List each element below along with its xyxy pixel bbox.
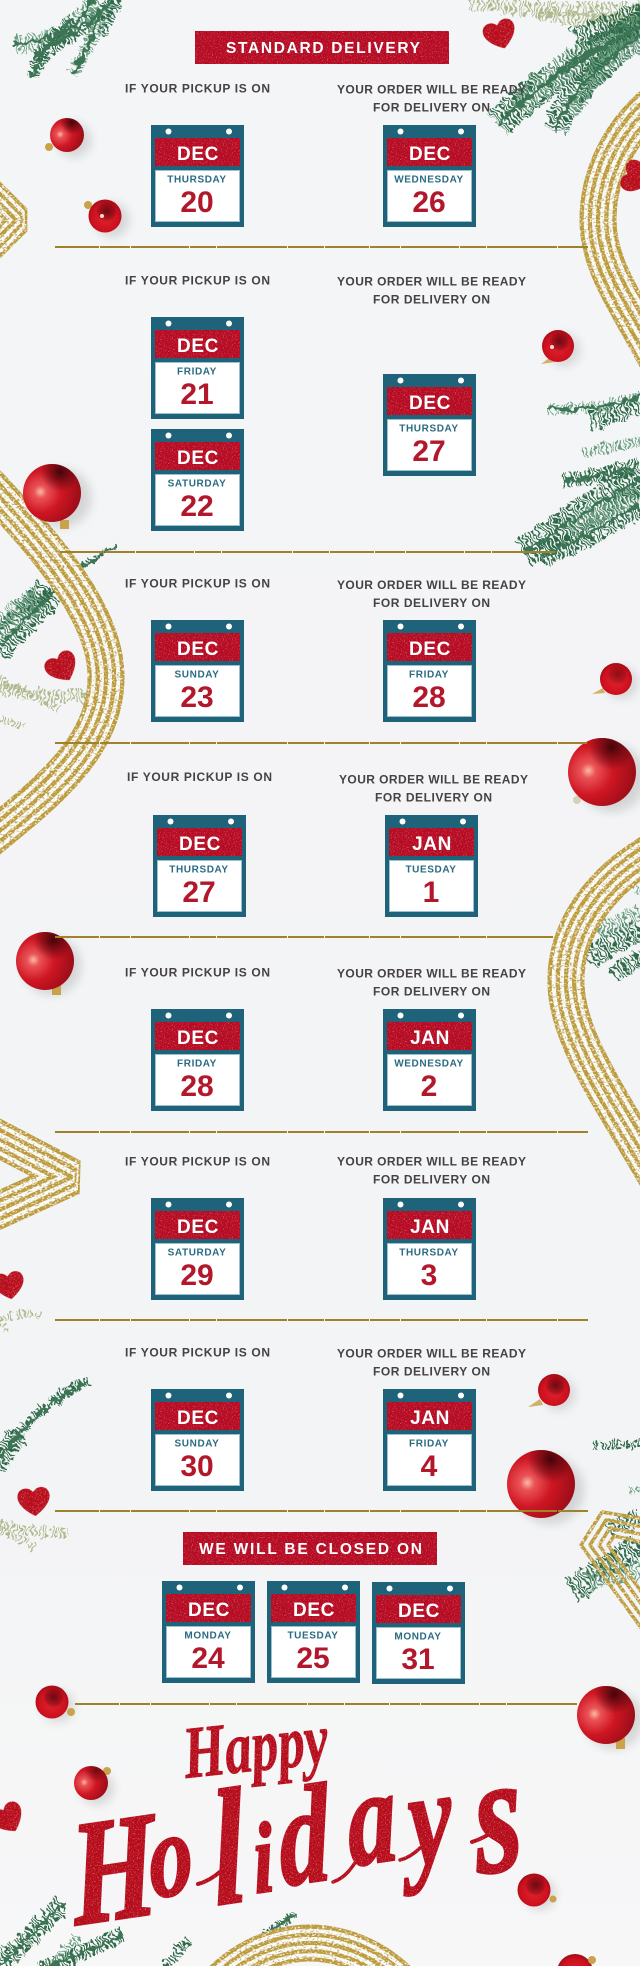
heart: left script [0,1798,29,1839]
bauble: right lower large [507,1450,584,1524]
calendar: Dec 27: 27 [412,435,446,468]
gold ribbon: right top curve [598,100,640,362]
calendar: Dec 22: SATURDAY [168,478,226,490]
heading: pickup: IF YOUR PICKUP IS ON [127,770,272,784]
bauble: right small [592,663,638,699]
banner: we will be closed on [183,1532,437,1565]
bauble: right script small [518,1874,556,1910]
heading: ready [337,1346,526,1378]
calendar: Dec 30: 30 [180,1450,214,1483]
calendar: Dec 28: FRIDAY [409,670,449,680]
calendar: Dec 24: MONDAY [184,1630,232,1642]
calendar: Dec 22: 22 [180,490,214,523]
foliage: top right branch [470,2,640,130]
calendar: Jan 4: FRIDAY [409,1438,449,1450]
heading: pickup: IF YOUR PICKUP IS ON [125,274,270,288]
script lettering: Holidays: o [144,1786,197,1924]
script lettering: Happy: Happy [178,1698,332,1794]
calendar: Jan 1 [385,815,478,917]
foliage: left middle sprigs [0,547,115,726]
heading: ready: YOUR ORDER WILL BE READY [337,966,526,980]
calendar: Dec 25: 25 [296,1642,330,1675]
calendar: Dec 29 [151,1198,244,1300]
calendar: Dec 21 [151,317,244,419]
calendar: Dec 24: 24 [191,1642,225,1675]
calendar: Dec 20: DEC [177,144,219,165]
bauble: right lower small [528,1374,575,1410]
calendar: Dec 31: 31 [401,1643,435,1676]
heading: pickup: IF YOUR PICKUP IS ON [125,966,270,980]
script lettering: Holidays: d [273,1755,336,1917]
gold ribbon: left curve [0,482,106,842]
divider 1 [55,246,588,248]
heading: pickup: IF YOUR PICKUP IS ON [125,1346,270,1360]
calendar: Dec 28: 28 [180,1070,214,1103]
heading: ready: FOR DELIVERY ON [375,790,492,804]
calendar: Jan 3 [383,1198,476,1300]
calendar: Dec 24 [162,1581,255,1683]
bauble: left above script [36,1686,75,1722]
row 5 [125,966,526,1111]
calendar: Dec 26: DEC [409,144,451,165]
calendar: Dec 29: 29 [180,1259,214,1292]
heading: ready [337,1154,526,1186]
heading: ready: FOR DELIVERY ON [373,1172,490,1186]
script lettering: Holidays: i [249,1801,277,1915]
row 4 [127,770,528,917]
script flourish: connecting strokes [198,1824,502,1884]
heading: ready: YOUR ORDER WILL BE READY [337,1154,526,1168]
calendar: Dec 21: 21 [180,378,214,411]
bauble: top left small [45,118,91,157]
calendar: Dec 25: DEC [293,1600,335,1621]
calendar: Dec 22 [151,429,244,531]
calendar: Jan 3: 3 [421,1259,437,1292]
gold ribbon: left chevron [0,1132,72,1216]
row 3 [125,576,526,722]
calendar: Dec 28: DEC [177,1028,219,1049]
heading: ready [337,578,526,610]
calendar: Jan 2: WEDNESDAY [394,1058,464,1070]
foliage: bottom left sprigs [0,1904,296,1966]
calendar: Dec 28: DEC [409,639,451,660]
calendar: Jan 2 [383,1009,476,1111]
calendar: Dec 20: THURSDAY [167,174,227,186]
heading: pickup: IF YOUR PICKUP IS ON [125,1154,270,1168]
divider 7 [55,1510,588,1512]
row 6 [125,1154,526,1300]
calendar: Jan 1: 1 [423,876,439,909]
bauble: right small dark [541,330,580,366]
divider 3 [55,742,587,744]
calendar: Dec 27 [383,374,476,476]
calendar: Dec 26: 26 [412,186,446,219]
bauble: left large [23,464,91,529]
banner: standard delivery: STANDARD DELIVERY [226,40,421,57]
script lettering: Holidays: s [466,1718,528,1912]
calendar: Jan 1: JAN [412,834,452,855]
calendar: Dec 31 [372,1582,465,1684]
gold ribbon: right lower corner [581,1512,640,1640]
calendar: Dec 28 [151,1009,244,1111]
calendar: Dec 23: SUNDAY [175,670,219,680]
calendar: Dec 23 [151,620,244,722]
calendar: Dec 24: DEC [188,1600,230,1621]
calendar: Dec 23: DEC [177,639,219,660]
gold ribbon: bottom arch [208,1943,412,1966]
heart: left lower [17,1486,52,1518]
heading: ready: YOUR ORDER WILL BE READY [337,578,526,592]
script lettering: Holidays: a [342,1740,401,1896]
script lettering: Holidays: H [65,1781,164,1958]
foliage: left 1320 sprig [0,1314,40,1330]
calendar: Jan 3: THURSDAY [399,1248,459,1258]
calendar: Dec 21: FRIDAY [177,366,217,378]
bauble: left script small [74,1766,114,1805]
foliage: top left branch [14,0,120,76]
calendar: Dec 27: DEC [179,834,221,855]
calendar: Jan 4: JAN [410,1408,450,1429]
heading: ready: YOUR ORDER WILL BE READY [337,1346,526,1360]
heading: ready: FOR DELIVERY ON [373,596,490,610]
calendar: Dec 30: DEC [177,1408,219,1429]
calendar: Dec 27: 27 [182,876,216,909]
calendar: Dec 31: DEC [398,1601,440,1622]
foliage: left lower sprig [0,1381,90,1546]
calendar: Jan 3: JAN [410,1217,450,1238]
banner: we will be closed on: WE WILL BE CLOSED ON [199,1541,422,1558]
heading: ready: FOR DELIVERY ON [373,100,490,114]
heading: ready: FOR DELIVERY ON [373,984,490,998]
divider 2 [60,551,555,553]
calendar: Dec 21: DEC [177,336,219,357]
calendar: Jan 4 [383,1389,476,1491]
foliage: right behind chevron [572,1444,640,1590]
script lettering: Holidays: l [205,1755,252,1942]
heading: ready: YOUR ORDER WILL BE READY [339,772,528,786]
calendar: Dec 28 [383,620,476,722]
heart: left edge [0,1270,27,1302]
heading: pickup: IF YOUR PICKUP IS ON [125,576,270,590]
calendar: Dec 22: DEC [177,448,219,469]
heading: ready [337,82,526,114]
gold ribbon: top left chevron [0,190,16,250]
calendar: Dec 28: 28 [412,681,446,714]
heading: ready [337,966,526,998]
bauble: left mid [16,932,81,995]
bauble: right above script [577,1686,640,1749]
script lettering: Holidays: y [393,1741,458,1897]
calendar: Dec 20: 20 [180,186,214,219]
divider 6 [55,1319,588,1321]
foliage: right lower sprig [590,885,640,975]
foliage: right middle sprigs [524,398,640,555]
heart: left middle [41,647,83,688]
bauble: right large [568,738,640,812]
script lettering: Holidays [65,1718,528,1958]
calendar: Dec 30: SUNDAY [175,1438,219,1450]
heading: ready: YOUR ORDER WILL BE READY [337,82,526,96]
calendar: Jan 1: TUESDAY [405,864,457,876]
row 1 [125,82,526,227]
bauble: bottom right [557,1954,596,1966]
calendar: Dec 31: MONDAY [394,1632,442,1642]
calendar: Jan 4: 4 [421,1450,438,1483]
gold ribbon: right lower curve [566,848,640,1180]
heading: pickup: IF YOUR PICKUP IS ON [125,82,270,96]
calendar: Dec 26: WEDNESDAY [394,174,464,186]
calendar: Dec 30 [151,1389,244,1491]
calendar: Dec 27: THURSDAY [169,864,229,876]
heading: ready: FOR DELIVERY ON [373,1364,490,1378]
calendar: Dec 27: THURSDAY [399,424,459,434]
calendar: Dec 26 [383,125,476,227]
calendar: Dec 25: TUESDAY [287,1630,339,1642]
heading: ready [337,274,526,306]
heading: ready: FOR DELIVERY ON [373,292,490,306]
bauble: dark under left [84,200,129,237]
calendar: Jan 2: 2 [421,1070,437,1103]
heading: ready [339,772,528,804]
calendar: Jan 2: JAN [410,1028,450,1049]
calendar: Dec 29: DEC [177,1217,219,1238]
heart: right edge [618,157,640,197]
calendar: Dec 28: FRIDAY [177,1058,217,1070]
calendar: Dec 29: SATURDAY [168,1248,226,1258]
divider 8 [75,1703,578,1705]
row 2 [125,274,526,531]
calendar: Dec 23: 23 [180,681,214,714]
divider 5 [55,1131,588,1133]
calendar: Dec 27: DEC [409,393,451,414]
divider 4 [55,936,553,938]
closed dates [162,1581,465,1684]
heading: ready: YOUR ORDER WILL BE READY [337,274,526,288]
calendar: Dec 20 [151,125,244,227]
calendar: Dec 27 [153,815,246,917]
banner: standard delivery [195,31,449,64]
calendar: Dec 25 [267,1581,360,1683]
heart: top right [481,16,520,53]
row 7 [125,1346,526,1491]
